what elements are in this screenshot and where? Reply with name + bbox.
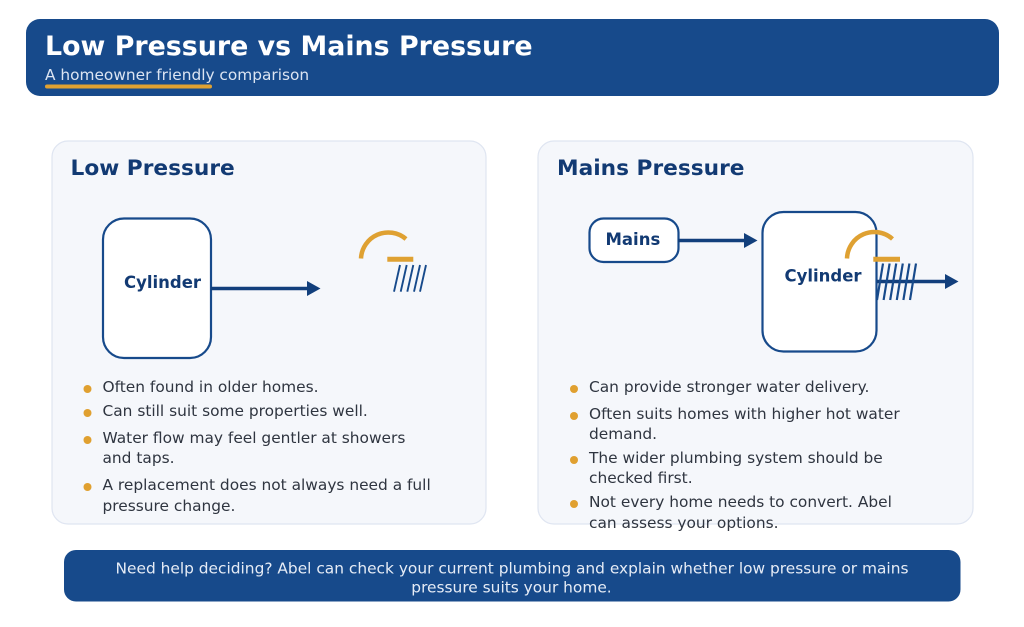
mains box: Mains xyxy=(606,230,660,249)
diagram: cylinder to shower xyxy=(103,218,426,358)
bullet 4 xyxy=(84,476,431,515)
icon: shower xyxy=(361,232,426,292)
heading: mains pressure: Mains Pressure xyxy=(557,156,745,181)
bullet 4: A replacement does not always need a full xyxy=(102,476,431,494)
bullet 3 xyxy=(84,429,405,467)
bullet 1: Can provide stronger water delivery. xyxy=(589,378,869,396)
header banner xyxy=(26,19,999,96)
cylinder: Cylinder xyxy=(784,266,862,286)
icon: shower xyxy=(847,232,916,300)
subtitle underline xyxy=(45,84,212,88)
panel: mains pressure xyxy=(538,141,973,532)
diagram: mains to cylinder to shower xyxy=(590,212,958,352)
bullet 2: Often suits homes with higher hot water xyxy=(589,405,900,423)
footer callout xyxy=(64,550,960,602)
arrow: cylinder outflow xyxy=(211,281,320,296)
bullet 1: Often found in older homes. xyxy=(102,378,319,396)
panel: low pressure xyxy=(52,141,486,524)
bullet 2: Can still suit some properties well. xyxy=(102,402,368,420)
cylinder: Cylinder xyxy=(124,273,202,292)
bullet 2: demand. xyxy=(589,425,657,443)
arrow: cylinder outflow xyxy=(877,274,958,289)
bullet list: mains pressure xyxy=(570,378,900,532)
bullet 2 xyxy=(570,405,900,443)
bullet 4: pressure change. xyxy=(102,497,235,515)
bullet 3 xyxy=(570,449,883,487)
bullet 3: and taps. xyxy=(102,449,174,467)
cylinder xyxy=(762,212,876,352)
bullet 3: Water flow may feel gentler at showers xyxy=(102,429,405,447)
title: Low Pressure vs Mains Pressure xyxy=(45,31,533,62)
subtitle: A homeowner friendly comparison xyxy=(45,66,309,84)
bullet 4: can assess your options. xyxy=(589,514,778,532)
heading: low pressure: Low Pressure xyxy=(70,156,235,181)
bullet 3: checked first. xyxy=(589,469,693,487)
mains box xyxy=(590,218,678,262)
bullet 4: Not every home needs to convert. Abel xyxy=(589,493,892,511)
bullet 4 xyxy=(570,493,892,532)
footer callout: Need help deciding? Abel can check your current plumbing and explain whether low pressure or mains xyxy=(116,560,908,578)
footer callout: pressure suits your home. xyxy=(411,578,612,596)
bullet 3: The wider plumbing system should be xyxy=(588,449,883,467)
arrow: mains to cylinder xyxy=(678,233,758,248)
cylinder xyxy=(103,218,211,358)
bullet list: low pressure xyxy=(84,378,431,515)
